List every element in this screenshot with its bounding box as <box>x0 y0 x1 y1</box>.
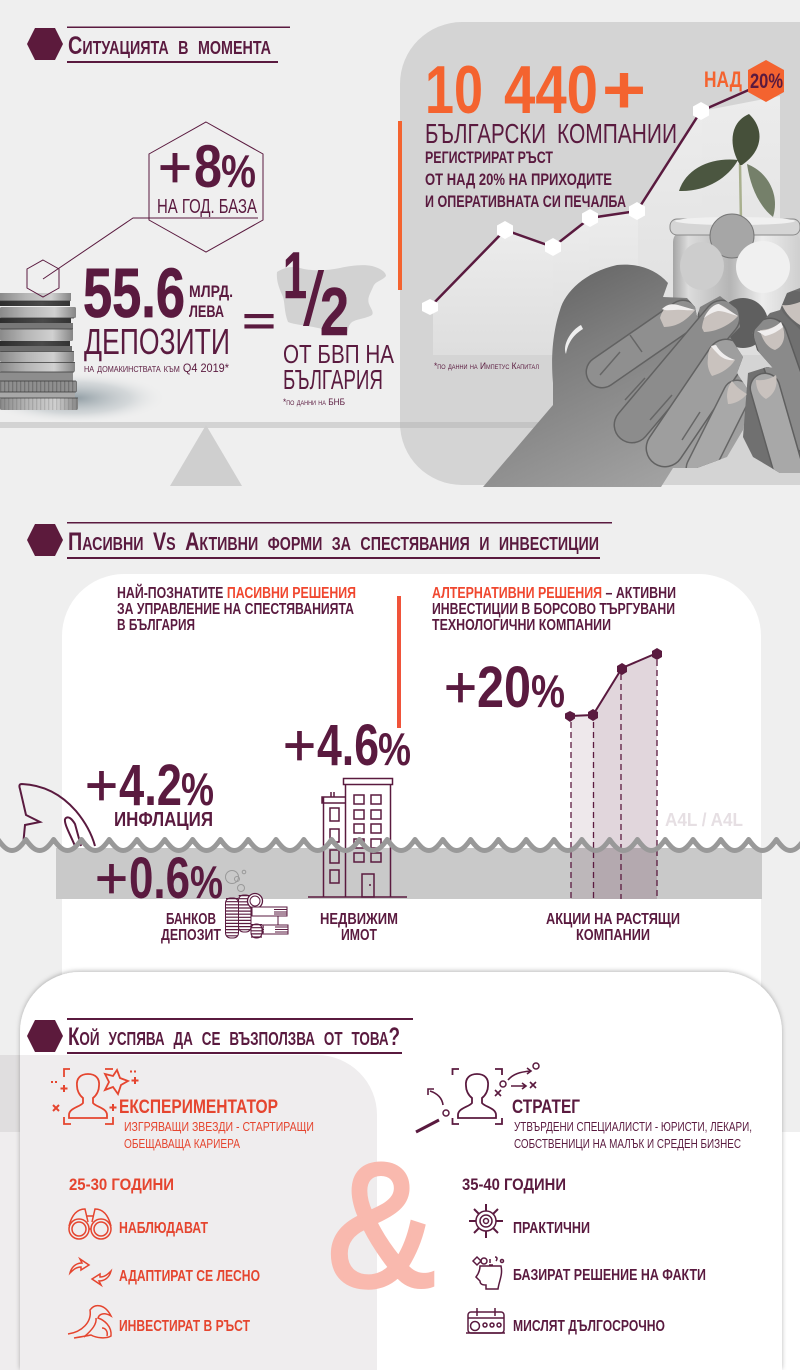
callout: +8%: + <box>158 135 192 200</box>
label: observe: НАБЛЮДАВАТ <box>119 1220 208 1237</box>
stat: bank deposit: + <box>95 846 128 911</box>
panel: grey growth panel <box>400 22 800 485</box>
icon: ship wheel <box>469 1204 503 1238</box>
callout: +8%: % <box>221 145 256 197</box>
stat: one half of GDP: ОТ БВП НА <box>283 339 395 369</box>
label: growth stocks: АКЦИИ НА РАСТЯЩИ <box>546 911 680 928</box>
stat: inflation: ИНФЛАЦИЯ <box>114 809 213 831</box>
balance beam and pivot <box>0 422 400 486</box>
icon: binoculars <box>69 1209 111 1239</box>
line chart: growth <box>422 85 760 315</box>
stat: deposits <box>83 254 233 375</box>
stat: deposits: ЛЕВА <box>189 302 224 321</box>
stat: inflation <box>85 753 214 831</box>
panel: passive and active investments <box>62 574 761 1114</box>
stat: real estate: НЕДВИЖИМ <box>320 911 398 928</box>
callout: +8%: НА ГОД. БАЗА <box>157 196 257 218</box>
stat: 10 440+ companies: И ОПЕРАТИВНАТА СИ ПЕЧАЛБА <box>425 192 626 211</box>
role: experimenter <box>69 1097 314 1194</box>
orange divider <box>398 121 402 290</box>
icon: calendar <box>466 1308 505 1333</box>
stat: +20%: % <box>531 665 565 717</box>
text: alternative solutions: ТЕХНОЛОГИЧНИ КОМПАНИИ <box>432 617 611 634</box>
role: strategist <box>462 1097 752 1194</box>
waves <box>0 840 800 850</box>
stat: real estate: + <box>283 713 316 778</box>
badge: over 20% <box>704 60 784 102</box>
equals sign: = <box>242 301 276 343</box>
map: Bulgaria <box>277 265 386 334</box>
icon: wave <box>68 1306 111 1338</box>
heading: who benefits <box>27 1018 413 1054</box>
label: invest in growth: ИНВЕСТИРАТ В РЪСТ <box>119 1318 250 1335</box>
icon: building <box>308 778 407 897</box>
role: strategist: 35-40 ГОДИНИ <box>462 1175 566 1194</box>
orange centre divider <box>397 596 401 728</box>
icon: strategist person with plays <box>416 1063 539 1132</box>
stat: 10 440+ companies: ОТ НАД 20% НА ПРИХОДИТЕ <box>425 170 612 189</box>
stat: 10 440+ companies <box>425 52 677 371</box>
stat: inflation: % <box>181 763 214 815</box>
chart: growing stocks <box>565 648 662 899</box>
stat: 10 440+ companies: БЪЛГАРСКИ <box>425 118 546 149</box>
callout: +8% <box>149 122 263 252</box>
text: passive solutions: ЗА УПРАВЛЕНИЕ НА СПЕСТЯВАНИЯТА <box>117 601 354 618</box>
icon: head with facts <box>473 1257 504 1289</box>
heading: situation <box>27 26 290 63</box>
badge: over 20%: НАД <box>704 67 742 92</box>
heading: passive vs active: Пасивни Vs Активни форми за спестявания и инвестиции <box>68 528 599 556</box>
ampersand: & <box>327 1126 435 1324</box>
panel: experimenter <box>0 1055 377 1370</box>
stat: bank deposit: % <box>190 856 223 908</box>
stat: bank deposit <box>95 846 223 944</box>
stat: deposits: ДЕПОЗИТИ <box>84 321 230 362</box>
stat: bank deposit: БАНКОВ <box>166 911 216 928</box>
text: passive solutions: В БЪЛГАРИЯ <box>117 617 195 634</box>
stat: inflation: 4.2 <box>119 753 182 818</box>
stat: one half of GDP: 2 <box>320 274 349 350</box>
stat: 10 440+ companies: РЕГИСТРИРАТ РЪСТ <box>425 148 553 167</box>
role: strategist: СТРАТЕГ <box>512 1097 580 1118</box>
stat: one half of GDP <box>283 238 395 407</box>
heading: who benefits: Кой успява да се възползва от това? <box>68 1023 400 1051</box>
label: practical: ПРАКТИЧНИ <box>513 1220 590 1237</box>
stat: deposits: МЛРД. <box>189 282 233 301</box>
icon: coins and banknotes <box>226 894 288 938</box>
image: coin stack <box>0 293 167 424</box>
panel: who benefits <box>20 972 782 1370</box>
role: experimenter: ОБЕЩАВАЩА КАРИЕРА <box>124 1136 240 1151</box>
stat: one half of GDP: *по данни на БНБ <box>283 397 345 407</box>
heading: passive vs active <box>27 522 612 559</box>
white lower background <box>0 1132 800 1370</box>
text: alternative solutions: АЛТЕРНАТИВНИ РЕШЕНИЯ – АКТИВНИ <box>432 585 676 602</box>
label: growth stocks: КОМПАНИИ <box>576 927 650 944</box>
stat: bank deposit: ДЕПОЗИТ <box>161 927 221 944</box>
text: passive solutions <box>117 584 356 634</box>
label: long term: МИСЛЯТ ДЪЛГОСРОЧНО <box>513 1318 665 1335</box>
stat: one half of GDP: / <box>303 257 325 342</box>
connector line and small hexagon <box>27 218 258 297</box>
stat: one half of GDP: 1 <box>283 238 307 312</box>
role: experimenter: ИЗГРЯВАЩИ ЗВЕЗДИ - СТАРТИРАЩИ <box>124 1119 314 1134</box>
icon: experimenter person with star <box>51 1069 138 1124</box>
bar backdrop of growth chart <box>433 96 780 355</box>
label: adapt: АДАПТИРАТ СЕ ЛЕСНО <box>119 1268 260 1285</box>
heading: situation: Ситуацията в момента <box>68 32 271 60</box>
ticker label: A4L / A4L <box>665 810 743 830</box>
callout: +8%: 8 <box>194 133 222 200</box>
water band <box>56 848 762 899</box>
text: passive solutions: НАЙ-ПОЗНАТИТЕ ПАСИВНИ РЕШЕНИЯ <box>117 584 356 602</box>
label: fact based: БАЗИРАТ РЕШЕНИЕ НА ФАКТИ <box>513 1267 706 1284</box>
stat: 10 440+ companies: КОМПАНИИ <box>557 118 677 149</box>
role: experimenter: ЕКСПЕРИМЕНТАТОР <box>119 1097 278 1118</box>
stat: bank deposit: 0.6 <box>129 846 190 911</box>
image: cupped hands <box>480 260 800 490</box>
role: experimenter: 25-30 ГОДИНИ <box>69 1175 174 1194</box>
icon: adapt arrows <box>70 1259 111 1285</box>
stat: +20% <box>444 655 565 720</box>
text: alternative solutions: ИНВЕСТИЦИИ В БОРСОВО ТЪРГУВАНИ <box>432 601 675 618</box>
stat: 10 440+ companies: 440 <box>504 52 598 128</box>
stat: 10 440+ companies: *по данни на Импетус Капитал <box>434 361 539 371</box>
stat: +20%: + <box>444 655 477 720</box>
stat: real estate: ИМОТ <box>341 927 377 944</box>
badge: over 20%: 20% <box>750 70 783 93</box>
label: growth stocks <box>546 911 680 944</box>
icon: bubbles <box>226 870 246 892</box>
stat: real estate <box>283 713 411 944</box>
icon: shark fin <box>19 784 95 846</box>
stat: +20%: 20 <box>477 655 531 720</box>
stat: one half of GDP: БЪЛГАРИЯ <box>283 364 383 395</box>
stat: 10 440+ companies: 10 <box>425 52 483 128</box>
stat: real estate: % <box>378 723 411 775</box>
stat: deposits: на домакинствата към Q4 2019* <box>84 361 229 375</box>
stat: real estate: 4.6 <box>317 713 379 778</box>
image: plant in a jar of coins <box>670 114 800 348</box>
stat: 10 440+ companies: + <box>602 52 646 128</box>
text: alternative solutions <box>432 585 676 634</box>
stat: inflation: + <box>85 753 118 818</box>
stat: deposits: 55.6 <box>83 254 185 332</box>
